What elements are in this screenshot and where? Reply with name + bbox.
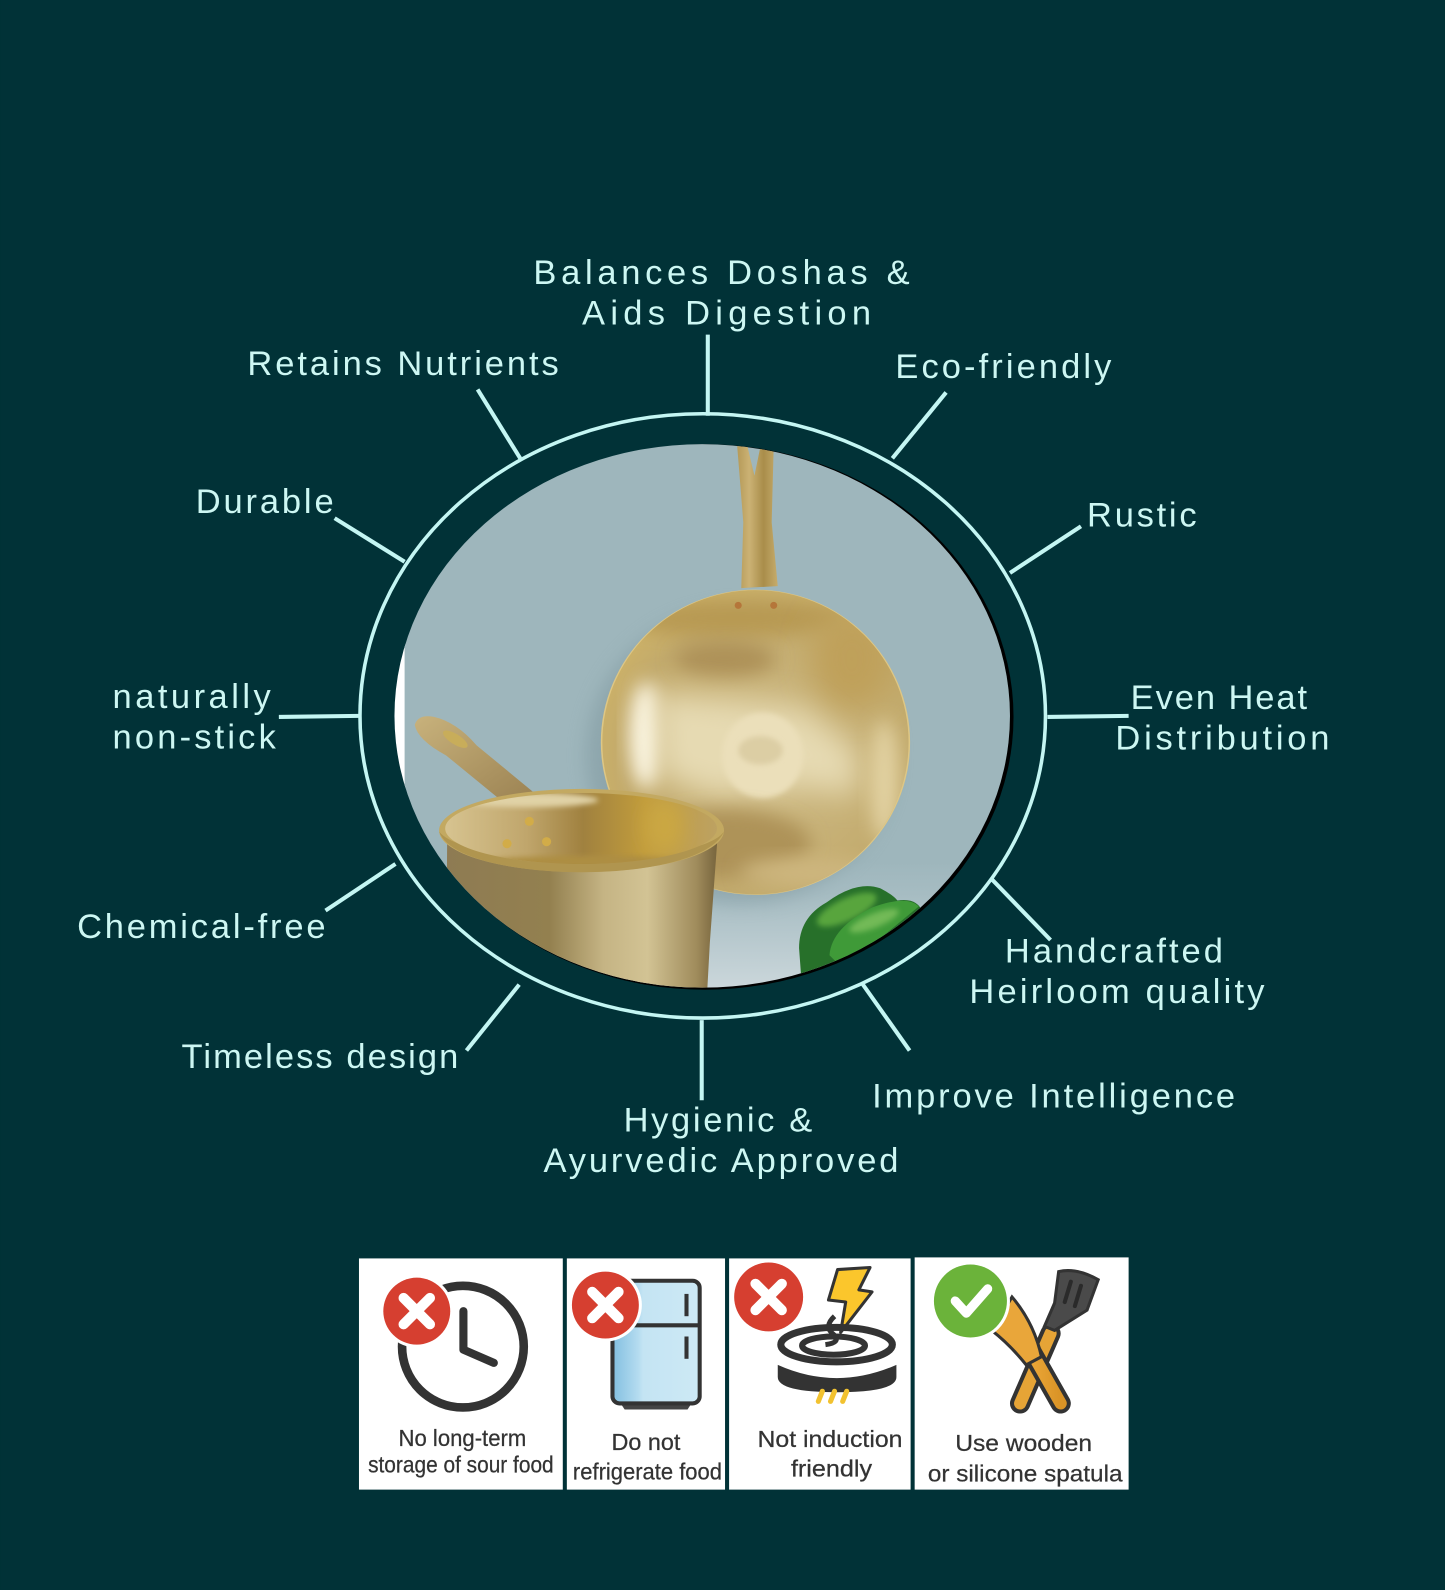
callout: Handcrafted Heirloom quality: Heirloom quality <box>969 973 1265 1011</box>
callout: Balances Doshas and Aids Digestion: Balances Doshas & <box>533 254 910 292</box>
callout: Rustic: Rustic <box>1087 496 1197 534</box>
callout: Durable <box>196 483 405 562</box>
callout: Timeless design: Timeless design <box>182 1038 458 1076</box>
caption: friendly <box>791 1455 872 1481</box>
caption: storage of sour food <box>368 1451 554 1477</box>
saucepan <box>415 716 725 999</box>
callout: Balances Doshas and Aids Digestion <box>533 254 910 416</box>
callout: Even Heat Distribution: Distribution <box>1115 719 1329 757</box>
callout: Rustic <box>1010 496 1197 573</box>
panel: do not refrigerate food <box>567 1258 725 1490</box>
icon: induction coil with lightning and red cross <box>734 1262 896 1401</box>
callout: Even Heat Distribution <box>1047 679 1329 757</box>
green pepper <box>799 886 923 975</box>
callout: Retains Nutrients: Retains Nutrients <box>247 345 559 383</box>
callout: Even Heat Distribution: Even Heat <box>1131 679 1308 717</box>
caption: Do not <box>611 1429 681 1455</box>
callout: Retains Nutrients <box>247 345 559 458</box>
photo: brass frying pan and saucepan <box>385 436 1023 999</box>
panel: no long-term storage of sour food <box>359 1258 563 1490</box>
icon: crossed wooden fork and spatula with green tick <box>931 1261 1098 1403</box>
caption: or silicone spatula <box>928 1460 1123 1486</box>
frying pan <box>586 446 913 904</box>
callout: Eco-friendly: Eco-friendly <box>895 348 1112 386</box>
caption: Not induction <box>757 1426 902 1452</box>
panel: not induction friendly <box>729 1258 911 1490</box>
panel: use wooden or silicone spatula <box>915 1257 1129 1490</box>
callout: naturally non-stick: naturally <box>113 678 272 716</box>
callout: naturally non-stick: non-stick <box>113 718 277 756</box>
caption <box>368 1425 554 1477</box>
callout: Timeless design <box>182 985 519 1076</box>
callout: Improve Intelligence <box>863 985 1235 1115</box>
caption: No long-term <box>399 1425 526 1451</box>
caption <box>573 1429 722 1484</box>
callout: Eco-friendly <box>892 348 1112 458</box>
callout: Improve Intelligence: Improve Intelligence <box>872 1077 1235 1115</box>
caption <box>757 1426 902 1481</box>
callout: Hygienic and Ayurvedic Approved: Hygienic & <box>624 1102 812 1140</box>
outer ring <box>360 414 1045 1018</box>
callout: Handcrafted Heirloom quality <box>969 879 1265 1011</box>
icon: fridge with red cross <box>569 1269 700 1410</box>
caption: refrigerate food <box>573 1458 722 1484</box>
caption <box>928 1430 1123 1486</box>
caption: Use wooden <box>955 1430 1092 1456</box>
callout: Hygienic and Ayurvedic Approved <box>544 1020 898 1180</box>
callout: Chemical-free: Chemical-free <box>77 908 326 946</box>
callout: Handcrafted Heirloom quality: Handcrafted <box>1005 932 1223 970</box>
callout: Durable: Durable <box>196 483 334 521</box>
icon: clock with red cross <box>380 1275 524 1407</box>
callout: Chemical-free <box>77 864 395 946</box>
callout: naturally non-stick <box>113 678 359 756</box>
callout: Hygienic and Ayurvedic Approved: Ayurvedic Approved <box>544 1142 898 1180</box>
callout: Balances Doshas and Aids Digestion: Aids Digestion <box>582 294 871 332</box>
